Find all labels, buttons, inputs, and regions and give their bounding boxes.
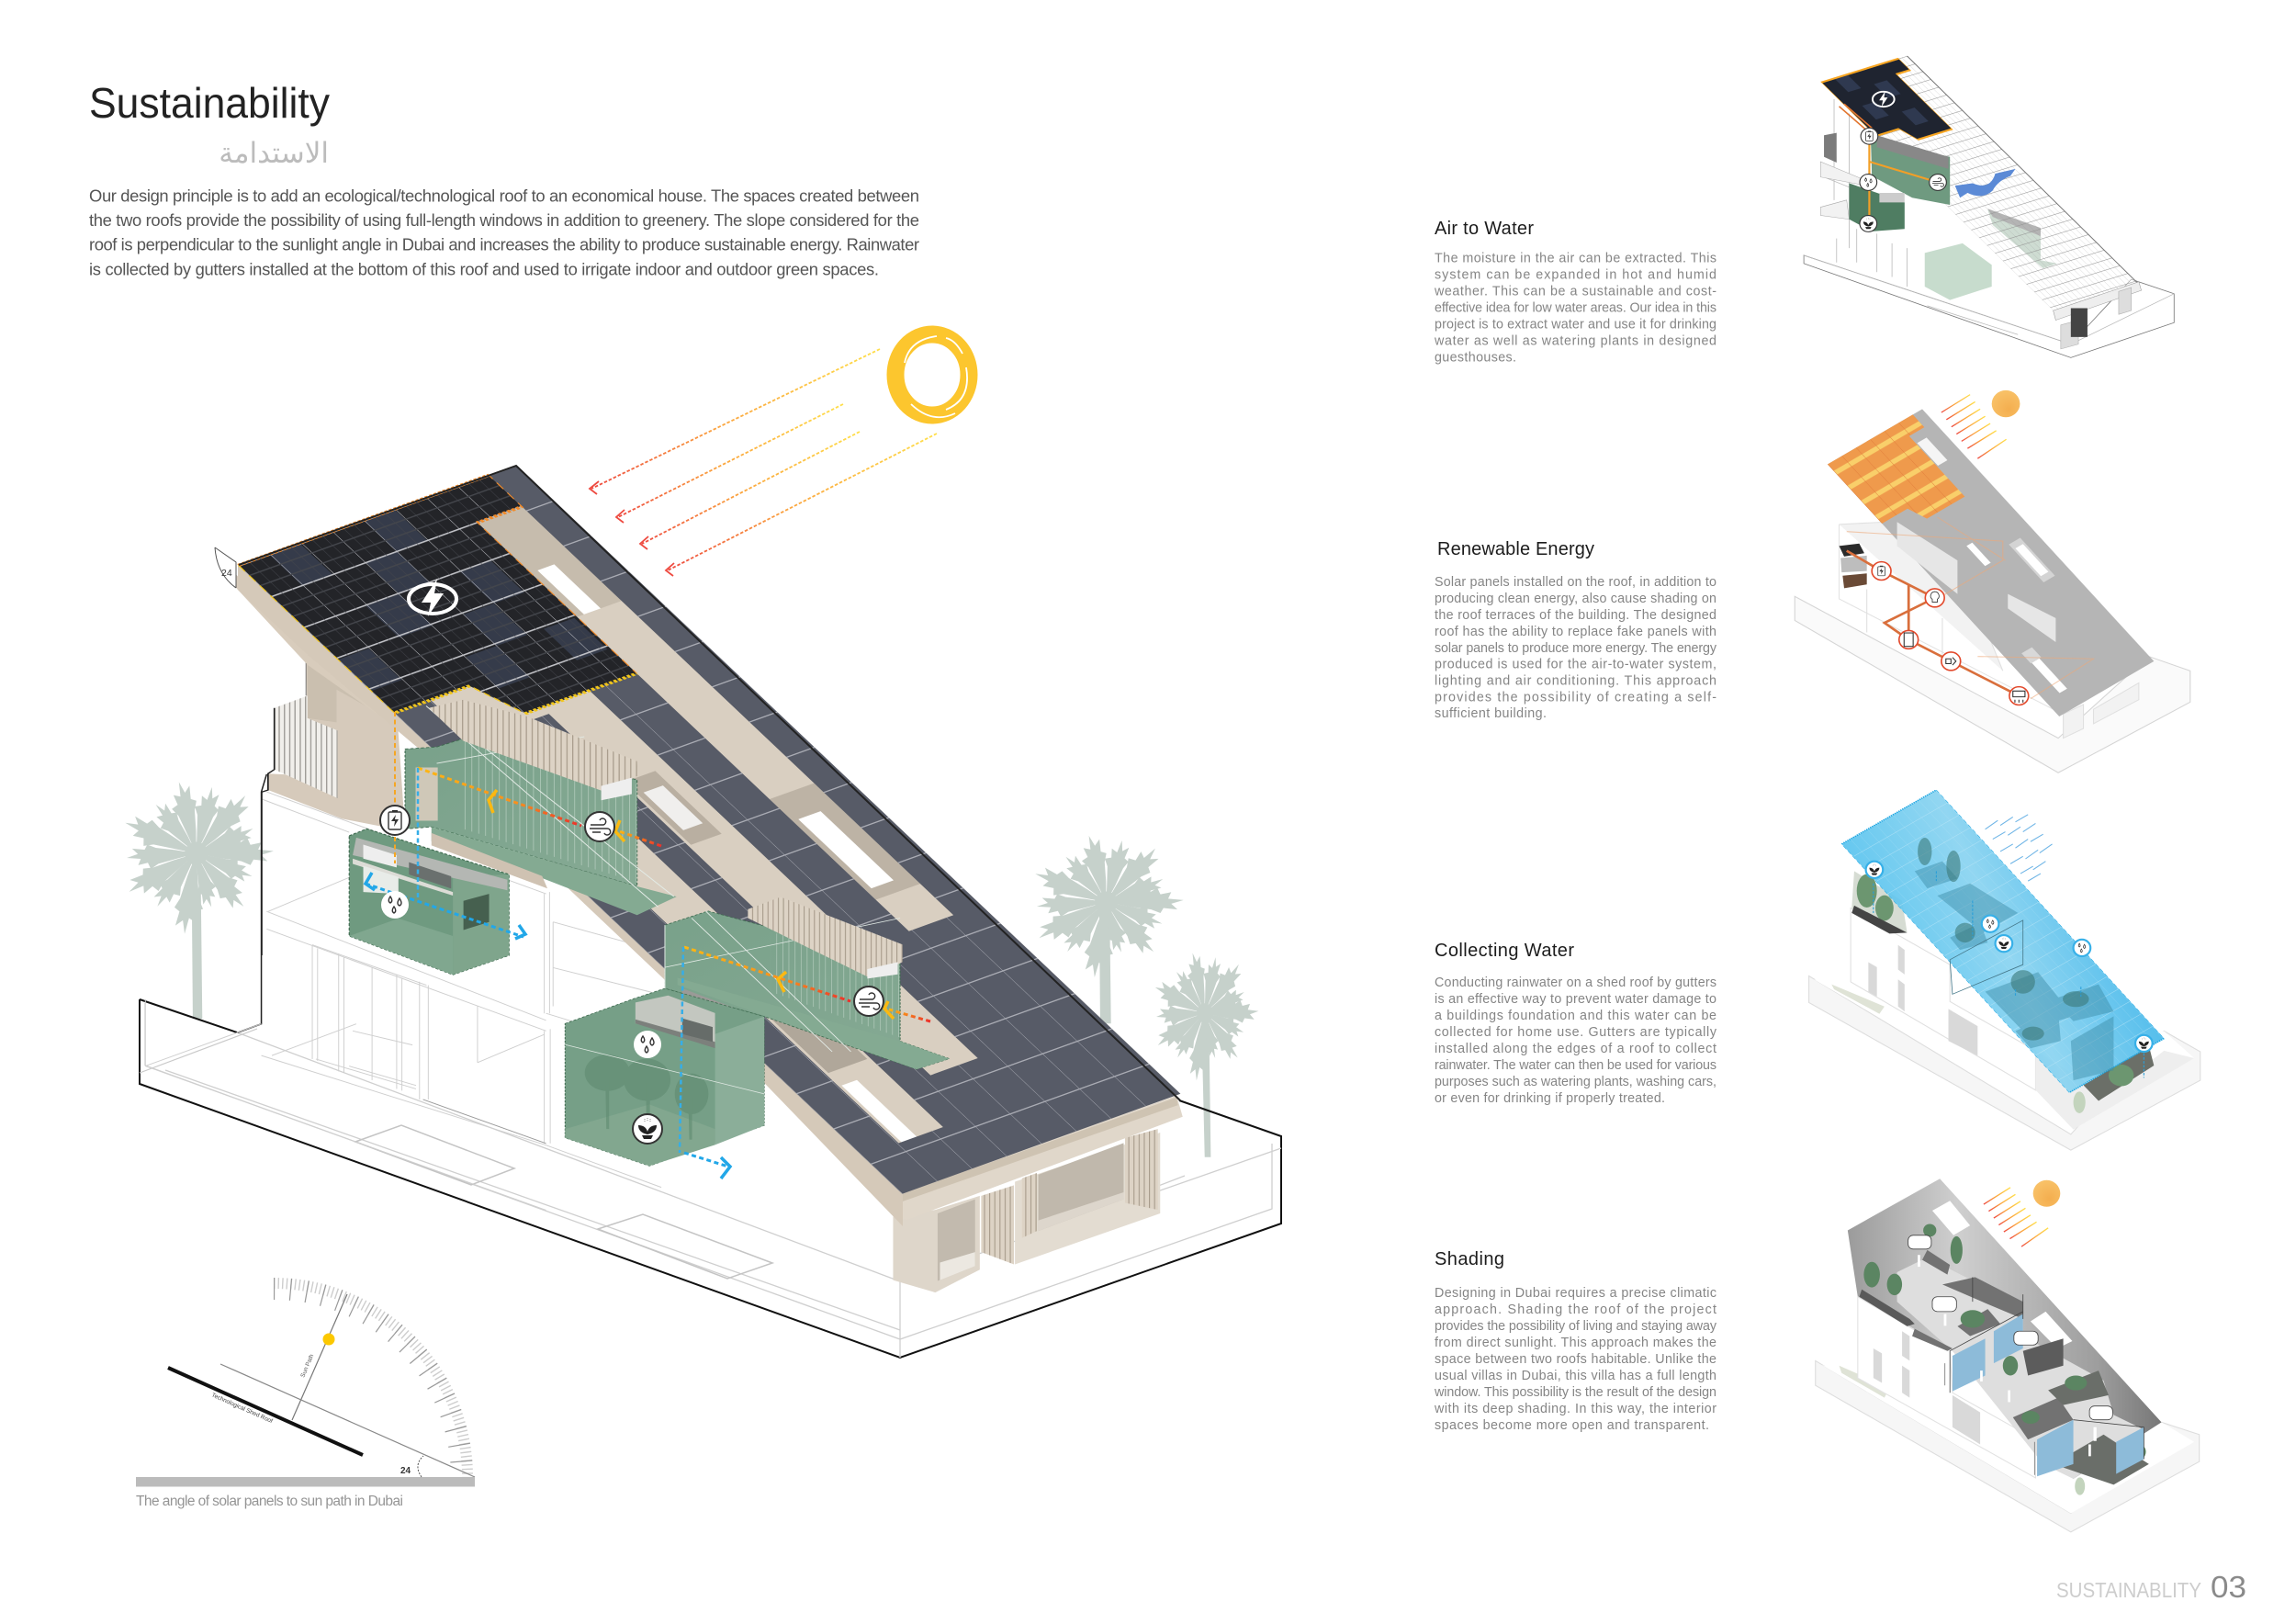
panel: renewable energy text <box>1435 539 1717 721</box>
intro paragraph <box>89 186 919 279</box>
green box: lower guest room with trees <box>565 925 764 1166</box>
sun <box>895 334 969 417</box>
green box: upper air-to-water room <box>405 700 677 915</box>
panel: shading text: with its deep shading. In this way, the interior <box>1434 1402 1716 1416</box>
panel: shading text <box>1434 1249 1717 1433</box>
panel: shading text: window. This possibility is the result of the design <box>1434 1385 1716 1400</box>
intro paragraph: roof is perpendicular to the sunlight angle in Dubai and increases the ability to produce sustainable energy. Rainwater <box>89 235 919 254</box>
panel: collecting water text: installed along the edges of a roof to collect <box>1435 1042 1716 1056</box>
transparent wireframe house <box>145 774 661 1211</box>
panel: collecting water text: collected for home use. Gutters are typically <box>1435 1025 1717 1040</box>
panel: renewable energy text: produced is used for the air-to-water system, <box>1435 658 1716 672</box>
panel: air to water text: effective idea for low water areas. Our idea in this <box>1435 301 1716 316</box>
panel: renewable energy text: sufficient building. <box>1435 706 1547 721</box>
panel: shading text: Designing in Dubai requires a precise climatic <box>1435 1286 1716 1301</box>
angle marker 24: 24 <box>221 568 232 579</box>
panel: renewable energy text: roof has the ability to replace fake panels with <box>1435 625 1716 639</box>
green box: upper guest room <box>349 829 509 975</box>
ray arrow heads <box>590 481 674 576</box>
panel: renewable energy diagram <box>1795 390 2190 773</box>
panel: air to water text: system can be expanded in hot and humid <box>1435 268 1716 283</box>
panel: collecting water text: Collecting Water <box>1435 941 1574 961</box>
panel: renewable energy text: producing clean energy, also cause shading on <box>1435 592 1716 606</box>
page footer: SUSTAINABLITY <box>2056 1578 2201 1602</box>
intro paragraph: is collected by gutters installed at the bottom of this roof and used to irrigate indoor and outdoor green spaces. <box>89 259 879 279</box>
lower concrete columns and eave <box>893 1096 1183 1292</box>
panel: renewable energy text: the roof terraces of the building. The designed <box>1435 608 1716 623</box>
airflow dashed arrows <box>366 712 930 1167</box>
panel: air to water text: weather. This can be a sustainable and cost- <box>1434 285 1716 299</box>
sun path angle diagram: 24 <box>400 1466 411 1476</box>
panel: collecting water diagram <box>1809 790 2200 1150</box>
panel: renewable energy text: Renewable Energy <box>1437 539 1594 559</box>
intro paragraph: the two roofs provide the possibility of using full-length windows in addition to greenery. The slope considered for the <box>89 210 919 230</box>
panel: collecting water text: rainwater. The water can then be used for various <box>1435 1058 1716 1073</box>
palm trees right <box>1030 833 1258 1157</box>
panel: air to water text: Air to Water <box>1435 219 1534 239</box>
arrow heads <box>366 790 894 1179</box>
panel: shading text: approach. Shading the roof of the project <box>1435 1303 1716 1317</box>
palm tree left <box>119 779 274 1019</box>
panel: air to water text <box>1434 219 1716 366</box>
panel: air to water text: The moisture in the air can be extracted. This <box>1435 252 1716 266</box>
page footer <box>2056 1570 2246 1604</box>
arabic subtitle: الاستدامة <box>219 137 329 170</box>
bolt icon on solar array <box>409 579 456 616</box>
roof underside band <box>238 565 903 1226</box>
panel: collecting water text: or even for drinking if properly treated. <box>1435 1091 1665 1106</box>
grey panel strips <box>239 465 1180 1194</box>
panel: air to water text: water as well as watering plants in designed <box>1434 334 1716 349</box>
skylight pits <box>310 507 1120 1148</box>
main axonometric building illustration <box>119 465 1281 1358</box>
panel: collecting water text <box>1435 941 1717 1106</box>
panel: collecting water text: a buildings foundation and this water can be <box>1435 1009 1716 1023</box>
panel: shading text: usual villas in Dubai, this villa has a full length <box>1435 1369 1716 1383</box>
panel: air to water diagram <box>1804 56 2174 357</box>
panel: shading diagram <box>1816 1179 2200 1532</box>
title: Sustainability <box>89 79 330 127</box>
panel: collecting water text: is an effective way to prevent water damage to <box>1435 992 1716 1007</box>
angle marker 24 <box>215 547 236 588</box>
panel: collecting water text: Conducting rainwater on a shed roof by gutters <box>1435 976 1716 990</box>
sun rays <box>591 349 937 570</box>
beige house wall and balcony <box>235 575 437 955</box>
solar array <box>239 475 681 748</box>
diagram caption: The angle of solar panels to sun path in Dubai <box>136 1494 403 1509</box>
panel: collecting water text: purposes such as watering plants, washing cars, <box>1435 1075 1716 1089</box>
sun path angle diagram: Technological Shed Roof <box>210 1392 274 1425</box>
panel: shading text: space between two roofs habitable. Unlike the <box>1435 1352 1716 1367</box>
sun path angle diagram: Sun Path <box>299 1353 315 1379</box>
panel: renewable energy text: provides the possibility of creating a self- <box>1435 691 1716 705</box>
page footer: 03 <box>2211 1570 2246 1604</box>
panel: air to water text: guesthouses. <box>1435 351 1516 366</box>
sloped roof with panels <box>239 465 1180 1194</box>
green box: lower air-to-water room <box>665 897 950 1069</box>
sun path angle diagram <box>136 1283 475 1486</box>
panel: air to water text: project is to extract water and use it for drinking <box>1435 318 1716 333</box>
panel: renewable energy text: solar panels to produce more energy. The energy <box>1435 641 1717 656</box>
panel: renewable energy text: lighting and air conditioning. This approach <box>1435 674 1716 689</box>
base slab outline <box>140 999 1281 1358</box>
panel: shading text: provides the possibility of living and staying away <box>1435 1319 1717 1334</box>
intro paragraph: Our design principle is to add an ecological/technological roof to an economical house. The spaces created between <box>89 186 919 206</box>
panel: shading text: from direct sunlight. This approach makes the <box>1435 1336 1716 1350</box>
panel: shading text: Shading <box>1435 1249 1504 1269</box>
system icons <box>380 806 884 1144</box>
panel: renewable energy text: Solar panels installed on the roof, in addition to <box>1435 575 1716 590</box>
panel: shading text: spaces become more open and transparent. <box>1435 1418 1709 1433</box>
